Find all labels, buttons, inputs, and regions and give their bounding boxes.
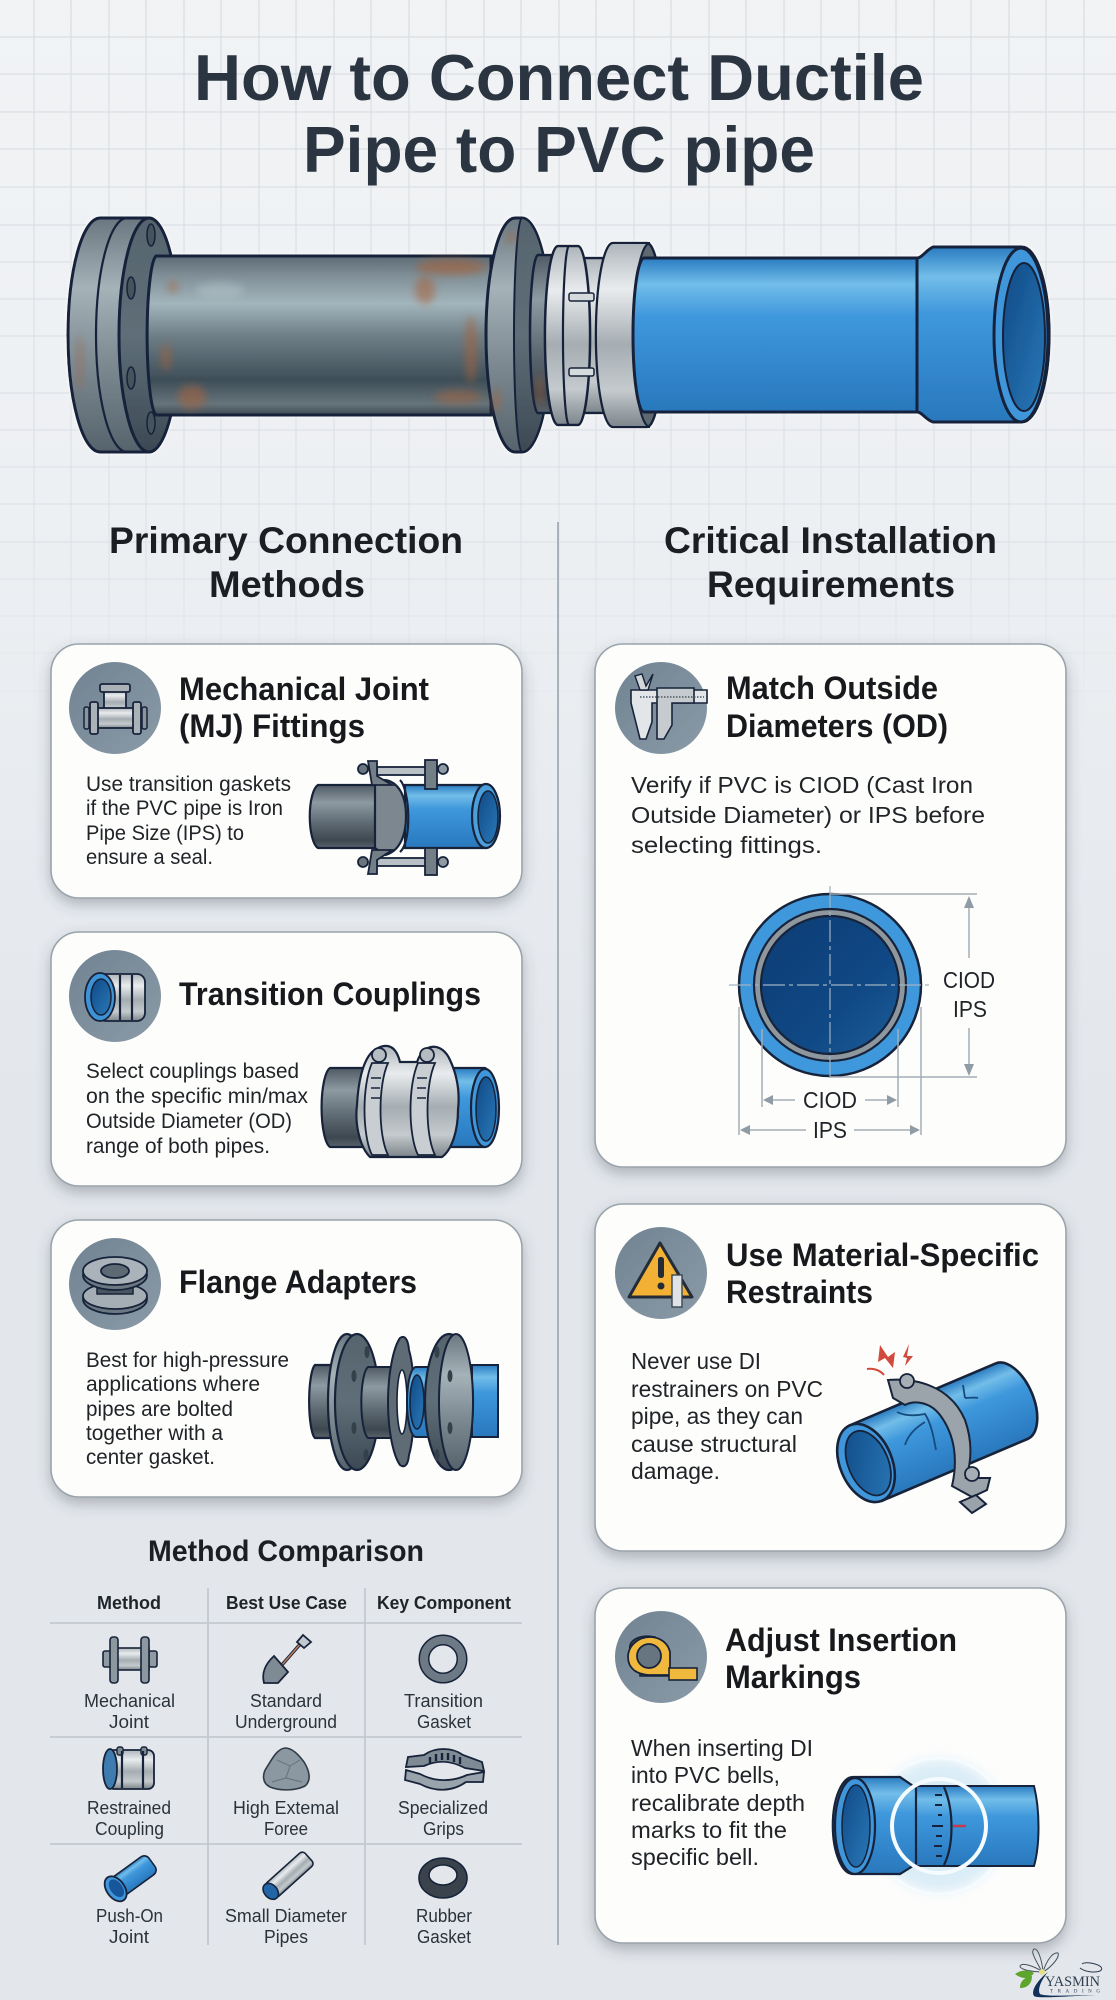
body text: selecting fittings.: [631, 832, 822, 858]
section heading: primary connection methods: [109, 520, 463, 605]
icon: stacked flanges: [69, 1238, 161, 1330]
row: push-on joint: Joint: [109, 1927, 149, 1947]
icon: shovel: [263, 1635, 311, 1683]
body text: [631, 1348, 823, 1484]
panel: transition couplings: [51, 932, 522, 1186]
hero illustration: ductile iron pipe joined to PVC pipe: [68, 218, 1049, 452]
body text: [86, 1060, 308, 1158]
icon: small diameter pipe: [260, 1851, 315, 1902]
body text: into PVC bells,: [631, 1762, 780, 1788]
panel: match outside diameters: [595, 644, 1066, 1167]
heading: Restraints: [726, 1274, 873, 1310]
body text: pipe, as they can: [631, 1403, 803, 1429]
body text: Never use DI: [631, 1348, 761, 1374]
body text: Outside Diameter) or IPS before: [631, 802, 985, 828]
heading: Diameters (OD): [726, 708, 948, 744]
heading: [726, 1237, 1039, 1310]
row: restrained coupling: Specialized: [398, 1798, 488, 1818]
body text: together with a: [86, 1422, 223, 1445]
body text: [86, 1349, 289, 1469]
icon: coupling: [69, 950, 161, 1042]
table header row: Key Component: [377, 1592, 511, 1613]
section heading: primary connection methods: Methods: [209, 564, 365, 605]
diagram: pipe cross-section with CIOD and IPS dimensions: CIOD: [943, 967, 995, 993]
row: mechanical joint: Underground: [235, 1712, 337, 1732]
section heading: primary connection methods: Primary Connection: [109, 520, 463, 561]
row: restrained coupling: Grips: [423, 1819, 464, 1839]
table header row: [97, 1592, 511, 1613]
icon: push-on joint: [100, 1851, 160, 1905]
icon: specialized grip: [405, 1749, 484, 1790]
column divider: [557, 522, 559, 1945]
title: Pipe to PVC pipe: [303, 113, 815, 186]
heading: Flange Adapters: [179, 1264, 417, 1300]
table header row: Method: [97, 1592, 161, 1613]
heading: [726, 670, 948, 744]
illustration: cracked PVC pipe under metal restrainer: [826, 1344, 1048, 1513]
body text: Pipe Size (IPS) to: [86, 822, 244, 845]
second flange and collar: [486, 218, 554, 452]
body text: restrainers on PVC: [631, 1376, 823, 1402]
icon: rock: [264, 1748, 309, 1790]
heading: Transition Couplings: [179, 976, 481, 1012]
row: push-on joint: Rubber: [416, 1906, 472, 1926]
body text: [631, 772, 985, 858]
panel: mechanical joint fittings: [51, 644, 522, 898]
section heading: critical installation requirements: [664, 520, 997, 605]
icon: pipe tee fitting: [69, 662, 161, 754]
body text: cause structural: [631, 1431, 797, 1457]
row: mechanical joint: Joint: [109, 1712, 149, 1732]
diagram: pipe cross-section with CIOD and IPS dimensions: IPS: [813, 1117, 847, 1143]
body text: if the PVC pipe is Iron: [86, 797, 283, 820]
body text: range of both pipes.: [86, 1135, 270, 1158]
panel: use material-specific restraints: [595, 1204, 1066, 1551]
body text: ensure a seal.: [86, 846, 213, 869]
logo: Yasmin Trading: TRADING: [1050, 1990, 1100, 1994]
illustration: mechanical joint: [310, 760, 500, 875]
body text: [86, 773, 291, 869]
row: mechanical joint: [84, 1635, 483, 1732]
body text: Outside Diameter (OD): [86, 1110, 292, 1133]
body text: specific bell.: [631, 1844, 759, 1870]
diagram: pipe cross-section with CIOD and IPS dimensions: [729, 886, 995, 1143]
row: restrained coupling: [87, 1747, 488, 1839]
row: restrained coupling: Restrained: [87, 1798, 171, 1818]
body text: When inserting DI: [631, 1735, 813, 1761]
panel: adjust insertion markings: [595, 1588, 1066, 1943]
table title: Method Comparison: [148, 1535, 424, 1568]
icon: transition gasket: [424, 1640, 462, 1678]
body text: recalibrate depth: [631, 1790, 805, 1816]
row: push-on joint: Push-On: [96, 1906, 163, 1926]
heading: [179, 671, 429, 744]
section heading: critical installation requirements: Requirements: [707, 564, 955, 605]
title: How to Connect Ductile: [194, 41, 924, 114]
logo: Yasmin Trading: YASMIN: [1045, 1974, 1100, 1990]
body text: Use transition gaskets: [86, 773, 291, 796]
icon: rubber gasket: [419, 1858, 467, 1898]
ductile iron pipe body: [147, 256, 491, 415]
illustration: flange adapter assembly: [309, 1334, 498, 1470]
body text: Verify if PVC is CIOD (Cast Iron: [631, 772, 973, 798]
illustration: insertion depth marks on PVC bell: [833, 1758, 1038, 1894]
heading: Mechanical Joint: [179, 671, 429, 707]
heading: [725, 1622, 957, 1695]
heading: Match Outside: [726, 670, 938, 706]
heading: Markings: [725, 1659, 861, 1695]
icon: tape measure: [615, 1611, 707, 1703]
row: push-on joint: [96, 1851, 472, 1947]
icon: caliper: [615, 662, 707, 754]
logo: Yasmin Trading: [1015, 1949, 1102, 1997]
body text: pipes are bolted: [86, 1398, 233, 1421]
center coupling rings: [545, 243, 663, 427]
icon: mechanical joint: [103, 1637, 157, 1683]
row: restrained coupling: High Extemal: [233, 1798, 339, 1818]
row: mechanical joint: Gasket: [417, 1712, 471, 1732]
row: push-on joint: Gasket: [417, 1927, 471, 1947]
body text: on the specific min/max: [86, 1085, 308, 1108]
section heading: critical installation requirements: Critical Installation: [664, 520, 997, 561]
panel: flange adapters: [51, 1220, 522, 1497]
icon: restrained coupling: [103, 1747, 154, 1789]
body text: marks to fit the: [631, 1817, 787, 1843]
heading: Use Material-Specific: [726, 1237, 1039, 1273]
body text: Select couplings based: [86, 1060, 299, 1083]
left double flange: [68, 218, 179, 452]
row: push-on joint: Small Diameter: [225, 1906, 347, 1926]
title: [194, 41, 924, 186]
diagram: pipe cross-section with CIOD and IPS dimensions: IPS: [953, 996, 987, 1022]
row: restrained coupling: Coupling: [95, 1819, 164, 1839]
icon: warning triangle: [615, 1227, 707, 1319]
comparison table: [50, 1535, 522, 1947]
row: mechanical joint: Standard: [250, 1691, 322, 1711]
heading: (MJ) Fittings: [179, 708, 365, 744]
body text: center gasket.: [86, 1446, 215, 1469]
body text: applications where: [86, 1373, 260, 1396]
blue PVC pipe with bell end: [633, 247, 1049, 422]
row: mechanical joint: Transition: [404, 1691, 483, 1711]
heading: Adjust Insertion: [725, 1622, 957, 1658]
diagram: pipe cross-section with CIOD and IPS dimensions: CIOD: [803, 1087, 857, 1113]
row: restrained coupling: Foree: [264, 1819, 308, 1839]
table header row: Best Use Case: [226, 1592, 347, 1613]
row: mechanical joint: Mechanical: [84, 1691, 175, 1711]
body text: [631, 1735, 813, 1870]
illustration: transition coupling: [322, 1046, 499, 1157]
row: push-on joint: Pipes: [264, 1927, 308, 1947]
body text: damage.: [631, 1458, 720, 1484]
body text: Best for high-pressure: [86, 1349, 289, 1372]
